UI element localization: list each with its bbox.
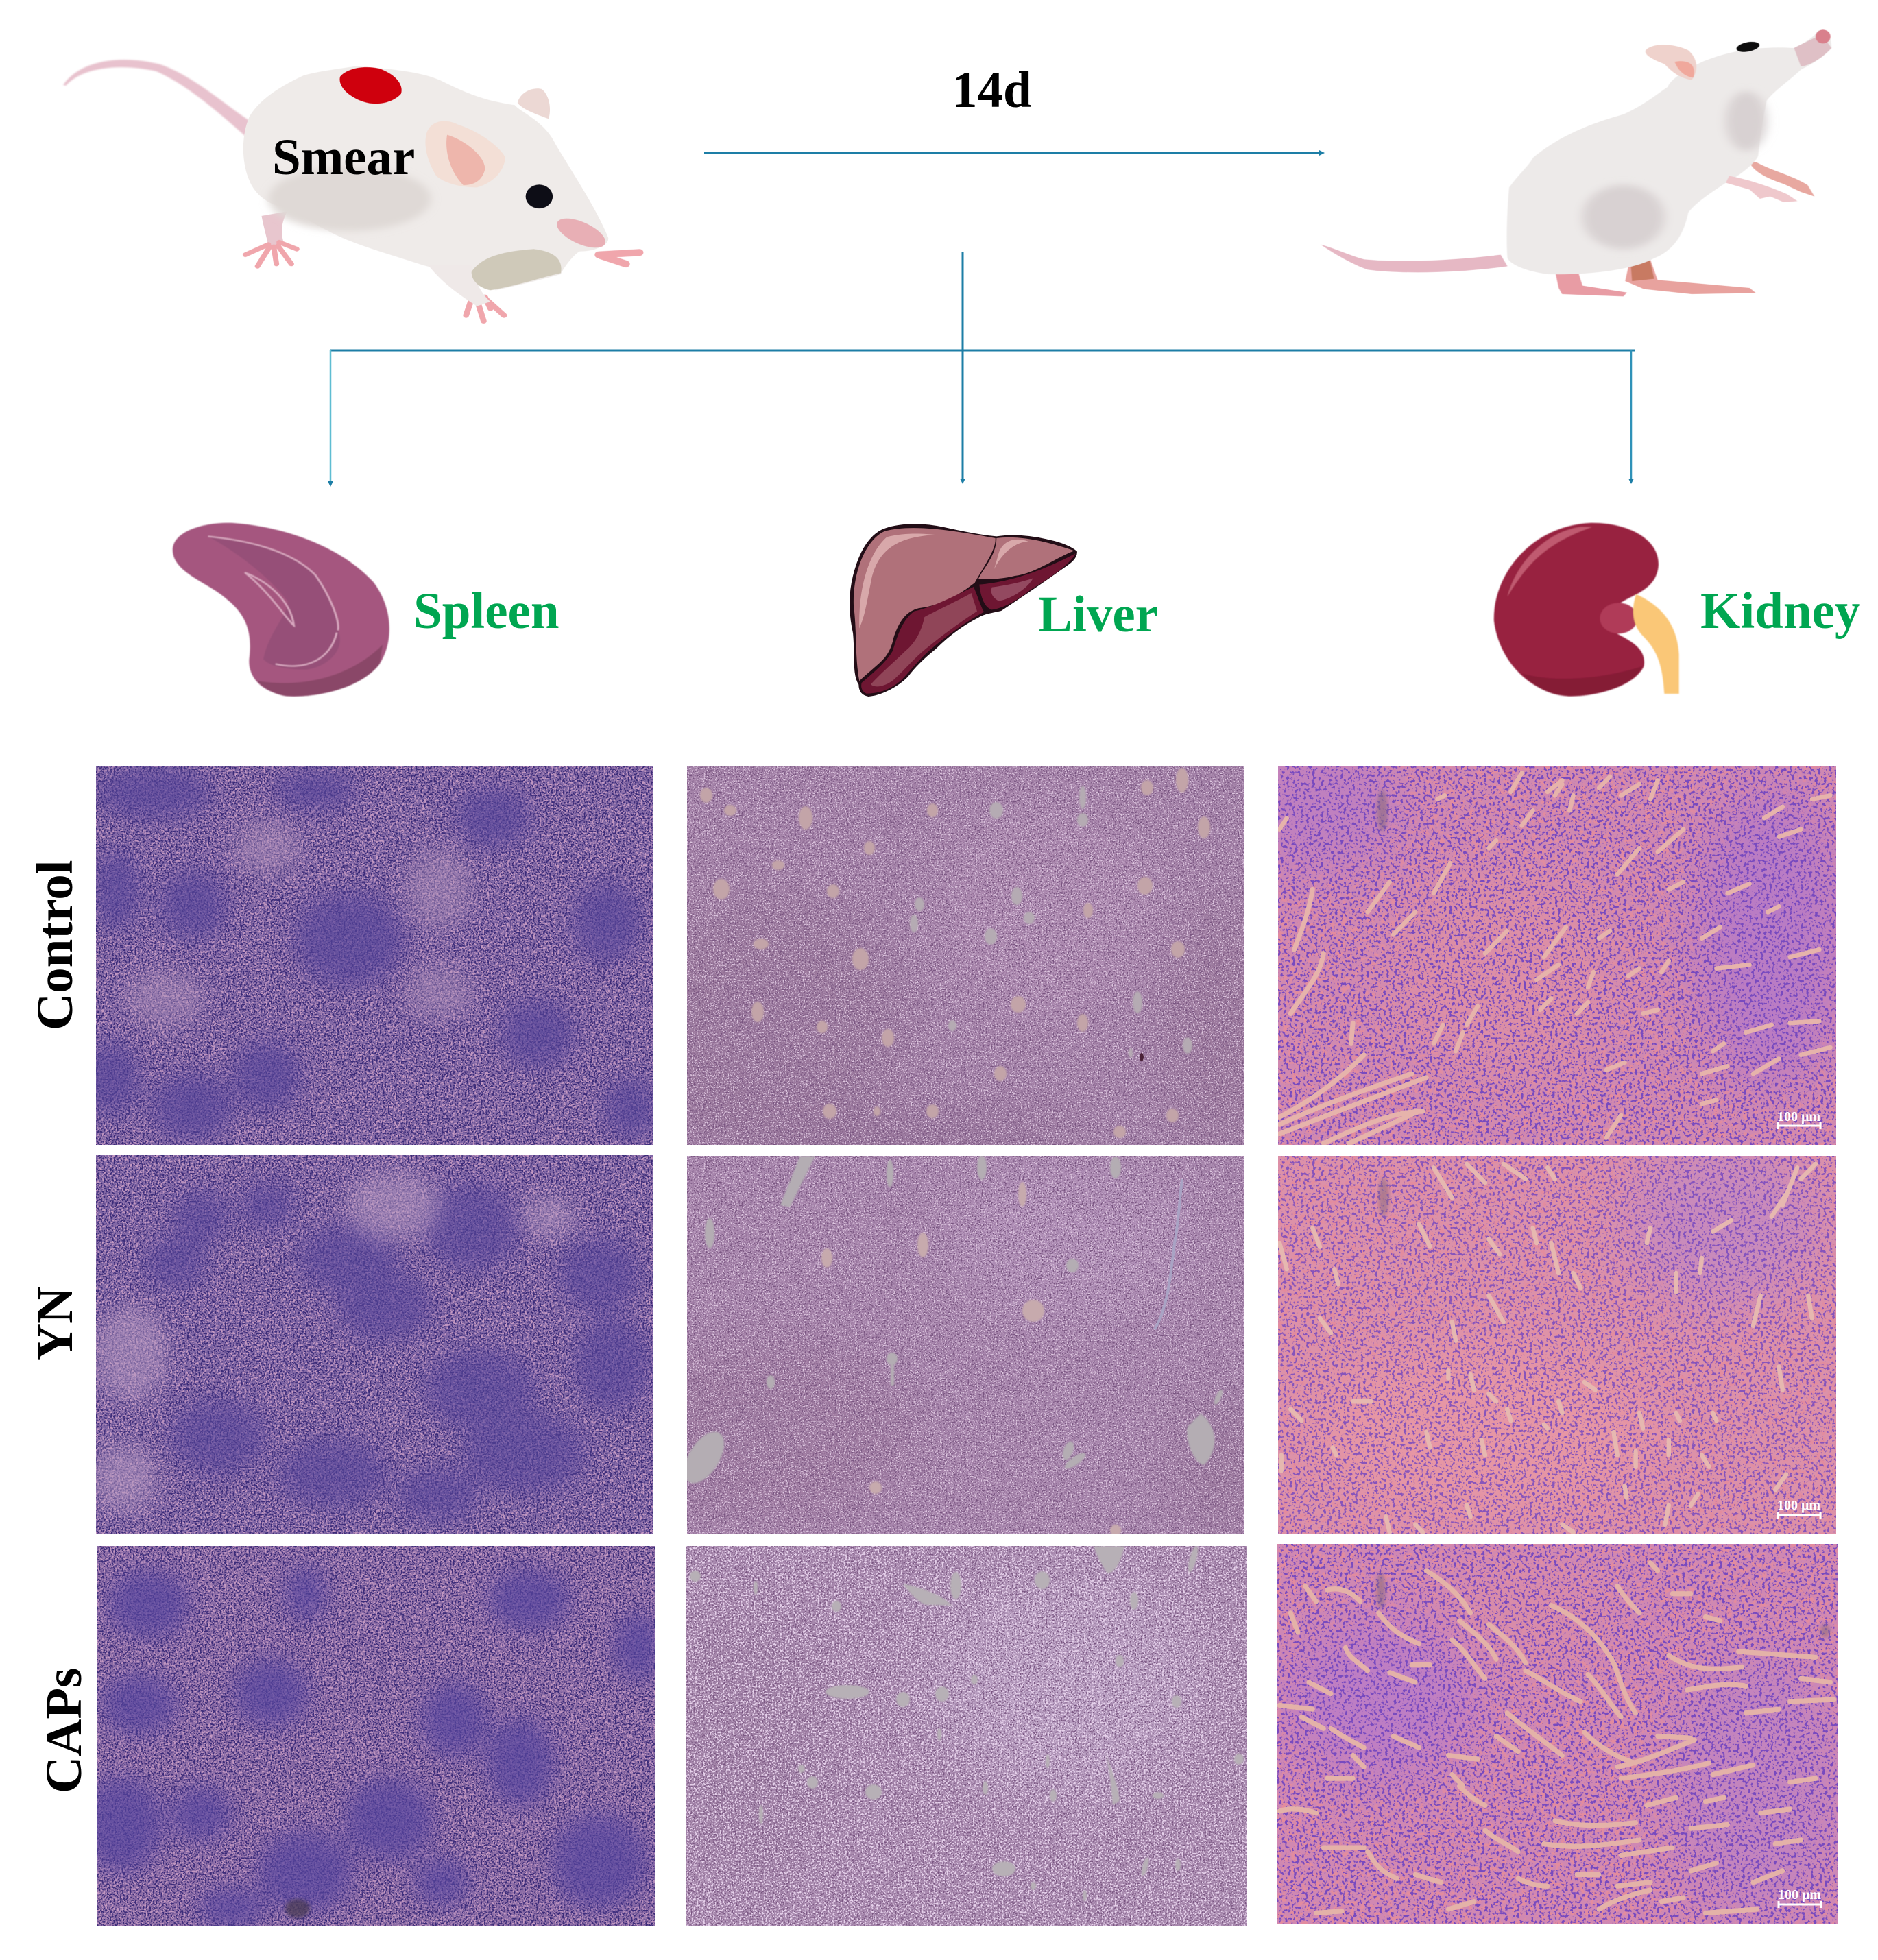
hind leg and foot [245,211,297,266]
mouse body [243,66,608,290]
tan sinusoid spots [700,768,1210,1138]
mouse: standing after 14 days [1321,29,1831,296]
arrow: to spleen [328,350,333,487]
vessels [690,1545,1244,1901]
panel: liver CAPs [686,1546,1247,1926]
icon: kidney [813,523,1679,697]
panel: liver YN [687,1156,1244,1534]
follicles [81,1566,662,1929]
smudges [1376,1573,1830,1638]
panel: liver control [687,766,1244,1145]
arrow head: to liver [960,479,965,484]
belly shadow [472,249,562,290]
tan spots [821,1182,1121,1536]
arrow stem [961,252,964,480]
back ear [518,88,550,119]
panel: kidney control [1278,766,1836,1145]
label: Spleen: Spleen [413,583,559,640]
panel: spleen control [96,766,653,1145]
body [1507,30,1831,274]
mouse tail: smeared mouse [63,60,254,141]
icon: liver [850,524,1076,696]
vessels [676,1155,1225,1490]
follicles [78,765,658,1141]
branching arrows to organs [328,252,1635,487]
tail [1321,245,1508,272]
eye [1735,40,1761,54]
scale bar: 100 μm [1777,1109,1820,1124]
front ear [425,121,505,187]
hind legs [1555,256,1756,296]
label: 14d: 14d [952,62,1032,119]
red smear patch [339,67,402,104]
snout [1794,29,1831,66]
scale bar: 100 μm [1778,1887,1821,1902]
label: Liver: Liver [1038,586,1158,643]
smudge [1378,1178,1389,1216]
front arm [1726,176,1797,202]
ear [1646,45,1696,80]
grey vessels [910,786,1192,1058]
follicles [144,1182,650,1522]
scale bar: 100 μm [1777,1498,1820,1513]
panel: spleen CAPs [97,1546,655,1926]
smudge [1377,790,1388,831]
label: Kidney: Kidney [1700,583,1860,640]
branch bar [330,350,1635,351]
row label: CAPs: CAPs [36,1668,93,1793]
row label: Control: Control [27,860,84,1030]
fur shading [1582,91,1767,249]
illustration: smeared mouse [243,66,639,321]
thin vessel [1155,1179,1182,1329]
front leg [428,265,490,306]
tubules [1279,1563,1834,1913]
panel: kidney YN [1278,1156,1836,1534]
front paw [599,252,639,264]
fore foot [466,297,504,321]
tubules [1279,773,1830,1144]
fur shading [268,167,431,231]
icon: spleen [173,523,389,697]
dark smudge [285,1899,310,1918]
panel: spleen YN [96,1155,653,1534]
dark spot [1140,1053,1144,1061]
arrow: 14d horizontal [704,150,1325,156]
label: Smear: Smear [272,129,415,186]
nose [551,213,611,254]
back arm [1750,162,1814,197]
eye [526,184,553,208]
tubules upper [1279,1164,1816,1341]
panel: kidney CAPs [1277,1544,1838,1924]
tubules lower [1281,1367,1786,1532]
arrow: to kidney [1628,350,1634,484]
row label: YN: YN [27,1287,84,1361]
